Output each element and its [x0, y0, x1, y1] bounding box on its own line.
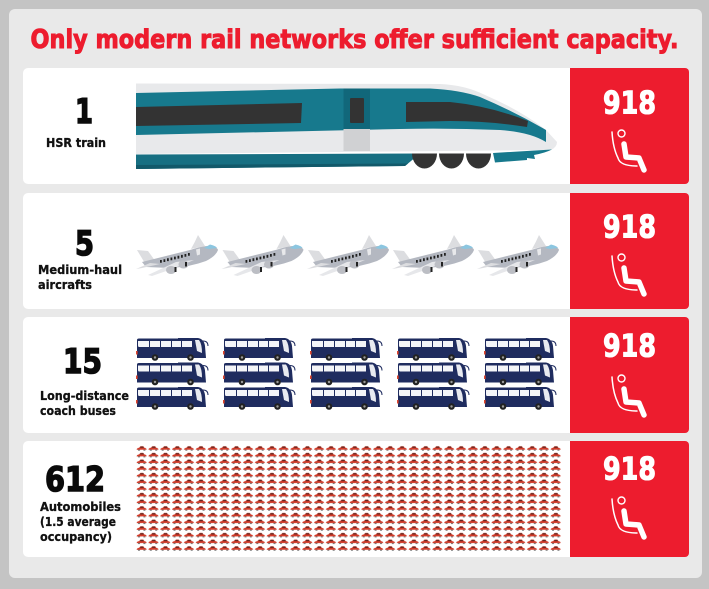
illustration: fifteen buses [136, 338, 556, 410]
seat tally: 918 [603, 328, 656, 364]
count: 5 aircrafts: aircrafts [38, 278, 92, 292]
count: 15 coach buses [40, 342, 129, 418]
count: 15 coach buses: Long-distance [40, 389, 129, 403]
icon: seat [612, 130, 644, 170]
count: 5 aircrafts: 5 [75, 224, 94, 264]
count: 1 HSR train: 1 [75, 92, 93, 132]
icon: seat [612, 254, 644, 294]
panel: HSR train [23, 68, 689, 184]
seat tally: 918 [603, 452, 656, 488]
icon: seat [612, 375, 644, 415]
illustration: high-speed train [136, 84, 557, 169]
panel: aircraft [23, 193, 689, 309]
seat tally [570, 441, 689, 557]
panel: coach buses [23, 317, 689, 433]
illustration: 612 cars grid [136, 445, 562, 552]
count: 15 coach buses: coach buses [40, 404, 116, 418]
count: 612 automobiles: 612 [45, 460, 105, 500]
count: 612 automobiles [40, 460, 121, 544]
count: 1 HSR train [46, 92, 106, 150]
count: 612 automobiles: occupancy) [40, 530, 112, 544]
count: 15 coach buses: 15 [63, 342, 102, 382]
count: 612 automobiles: Automobiles [40, 500, 121, 514]
seat tally: 918 [603, 210, 656, 246]
count: 1 HSR train: HSR train [46, 136, 106, 150]
illustration: five planes [136, 235, 559, 276]
seat tally [570, 317, 689, 433]
seat tally [570, 193, 689, 309]
icon: seat [612, 497, 644, 537]
count: 5 aircrafts: Medium-haul [38, 263, 122, 277]
count: 5 aircrafts [38, 224, 122, 292]
panel: automobiles [23, 441, 689, 557]
seat tally [570, 68, 689, 184]
seat tally: 918 [603, 86, 656, 122]
count: 612 automobiles: (1.5 average [40, 515, 116, 529]
